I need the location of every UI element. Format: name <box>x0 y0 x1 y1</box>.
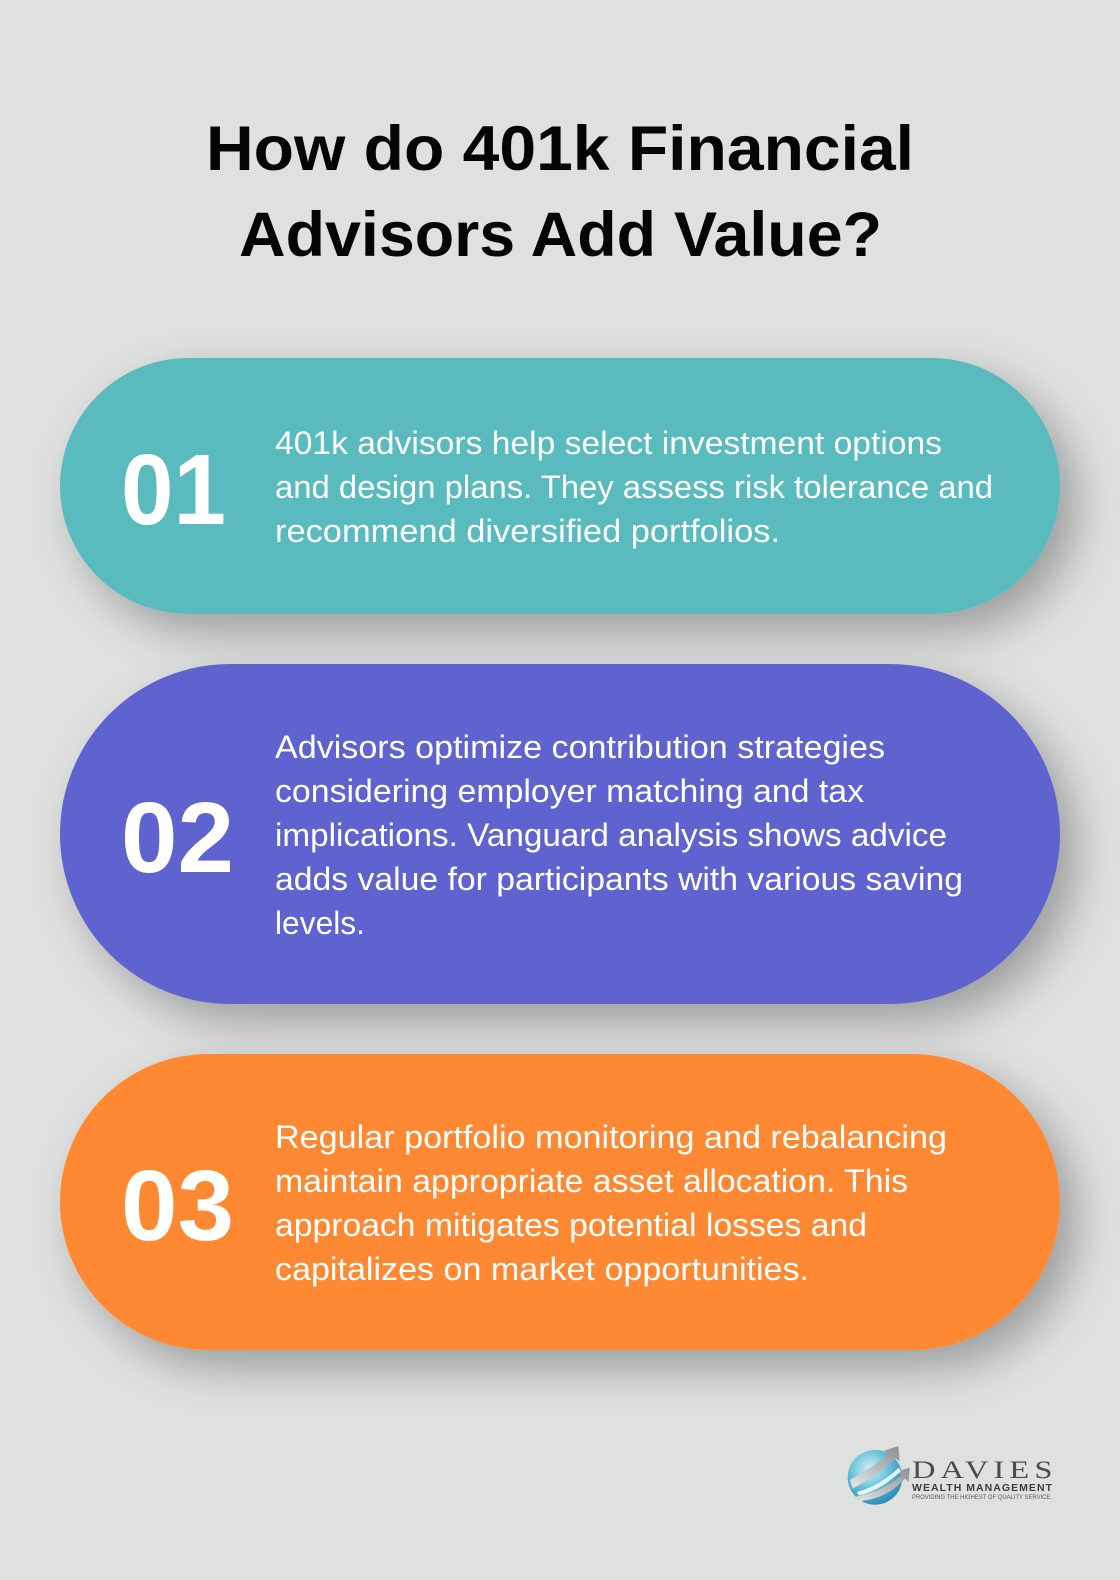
title: Advisors Add Value? <box>239 200 882 270</box>
text block: step 02 description: considering employer matching and tax <box>275 773 864 809</box>
logo tagline: PROVIDING THE HIGHEST OF QUALITY SERVICE. <box>912 1495 1052 1501</box>
text block: step 02 description: adds value for participants with various saving <box>275 861 963 897</box>
text block: step 02 description <box>275 729 963 941</box>
title: How do 401k Financial <box>206 114 914 184</box>
panel: step 01 <box>60 358 1060 614</box>
icon: globe with arrows <box>845 1446 910 1505</box>
logo: Davies Wealth Management <box>845 1446 1053 1505</box>
text block: step 01 description: 401k advisors help select investment options <box>275 425 942 461</box>
number 03: 03 <box>121 1150 234 1262</box>
text block: step 02 description: implications. Vanguard analysis shows advice <box>275 817 947 853</box>
number 01: 01 <box>121 434 226 546</box>
logo subtitle: WEALTH MANAGEMENT <box>912 1482 1053 1494</box>
panel: step 02 <box>60 664 1060 1004</box>
text block: step 03 description: approach mitigates potential losses and <box>275 1207 867 1243</box>
number 02: 02 <box>121 782 234 894</box>
panel: step 03 <box>60 1054 1060 1350</box>
text block: step 03 description: capitalizes on market opportunities. <box>275 1251 809 1287</box>
text block: step 02 description: Advisors optimize contribution strategies <box>275 729 885 765</box>
text block: step 03 description: maintain appropriate asset allocation. This <box>275 1163 908 1199</box>
text block: step 03 description <box>275 1119 947 1287</box>
text block: step 01 description: and design plans. They assess risk tolerance and <box>275 469 993 505</box>
text block: step 03 description: Regular portfolio monitoring and rebalancing <box>275 1119 947 1155</box>
text block: step 02 description: levels. <box>275 905 365 941</box>
text block: step 01 description <box>275 425 993 549</box>
title <box>206 114 914 270</box>
text block: step 01 description: recommend diversified portfolios. <box>275 513 780 549</box>
logo wordmark: DAVIES <box>912 1456 1052 1484</box>
